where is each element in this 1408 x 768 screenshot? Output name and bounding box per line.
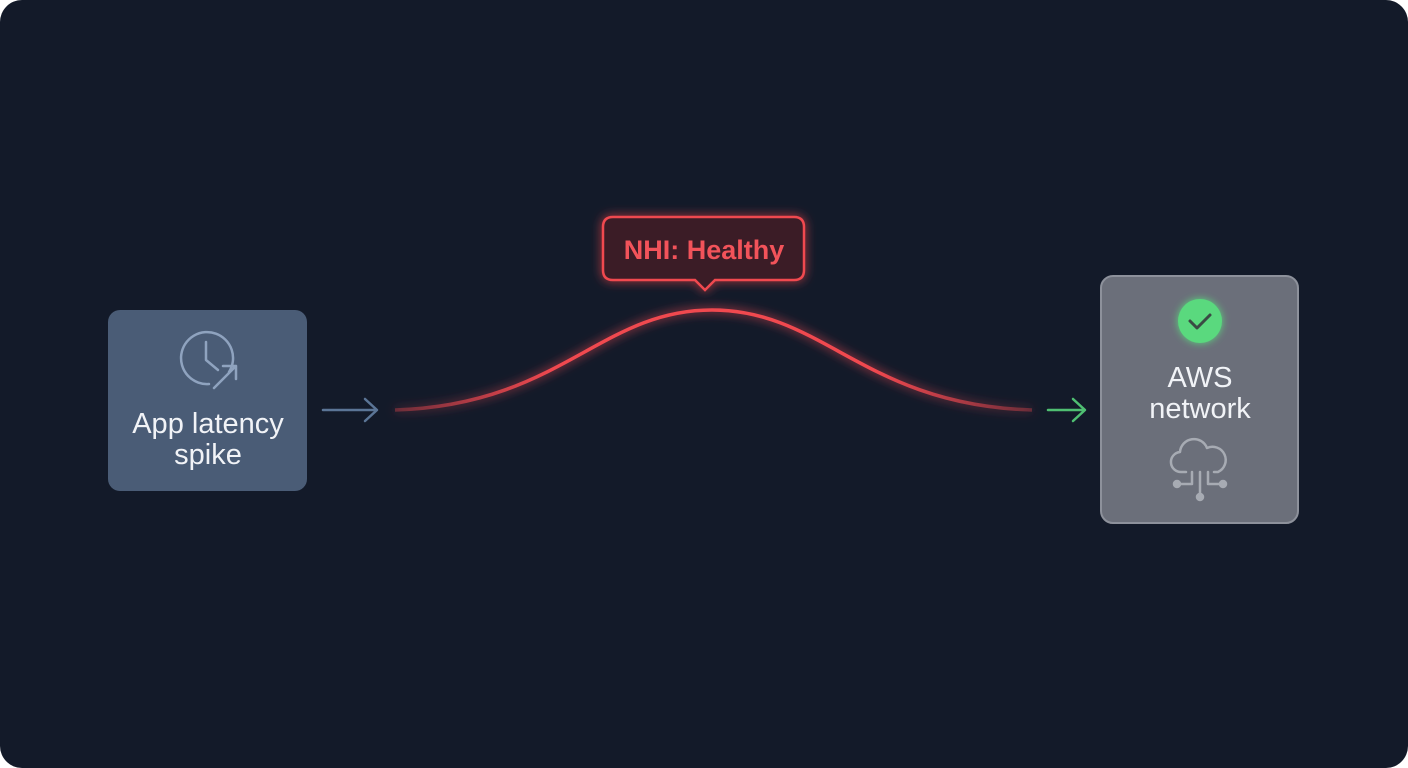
icon: clock with arrow	[181, 332, 236, 388]
arrow: left	[323, 399, 377, 421]
arrow: right green	[1048, 399, 1085, 421]
icon: cloud network	[1171, 439, 1226, 500]
box: app latency spike: spike	[174, 439, 242, 471]
callout: NHI Healthy	[603, 217, 804, 290]
box: AWS network: network	[1149, 393, 1251, 425]
box: AWS network	[1101, 276, 1298, 523]
box: app latency spike	[108, 310, 307, 491]
curve: red bell	[395, 310, 1032, 410]
icon: green check	[1178, 299, 1222, 343]
callout: NHI Healthy: NHI: Healthy	[624, 235, 784, 265]
label: app latency spike: App latency	[132, 408, 284, 440]
label: AWS network: AWS	[1168, 362, 1232, 394]
